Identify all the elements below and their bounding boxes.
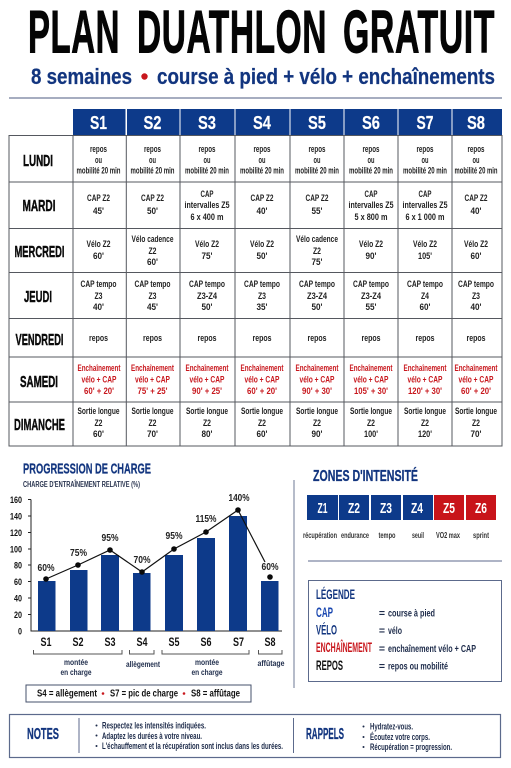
row: dimanche: Sortie longue [241, 406, 283, 417]
zone labels: tempo [378, 531, 396, 540]
row: samedi: 75' + 25' [138, 386, 168, 397]
row: mardi: CAP [418, 189, 432, 200]
row: lundi: mobilité 20 min [185, 166, 229, 176]
row: mardi: CAP [200, 189, 214, 200]
legend rows: ENCHAÎNEMENT [316, 638, 372, 655]
row: dimanche: Sortie longue [78, 406, 120, 417]
bar chart: 115% [196, 513, 217, 525]
row: mardi: intervalles Z5 [348, 200, 394, 211]
row: jeudi: 50' [312, 302, 322, 313]
row: mardi: 50' [147, 206, 158, 217]
row: mercredi: MERCREDI [14, 244, 64, 261]
table header weeks: S2 [144, 113, 162, 133]
row: jeudi: CAP tempo [407, 279, 443, 290]
bar chart: 80 [14, 560, 22, 572]
bar chart: S3 [104, 635, 116, 649]
legend rows [316, 604, 476, 673]
row: mardi: CAP Z2 [141, 193, 164, 204]
bar chart: 40 [14, 594, 22, 604]
phase brackets: affûtage [258, 659, 285, 668]
heading: rappels: RAPPELS [306, 726, 344, 743]
row: mercredi: Vélo Z2 [195, 239, 219, 250]
row: vendredi: repos [466, 333, 486, 344]
row: samedi: vélo + CAP [135, 374, 170, 386]
row: samedi: vélo + CAP [244, 374, 280, 386]
row: samedi: Enchaînement [186, 363, 229, 374]
heading: progression: PROGRESSION DE CHARGE [23, 460, 151, 478]
row: jeudi: 35' [256, 302, 268, 313]
table header weeks: S8 [467, 113, 485, 133]
row: mercredi: Z2 [313, 246, 321, 257]
zone bar: Z2 [348, 500, 360, 517]
row: lundi: repos [254, 144, 270, 155]
row: jeudi: Z3-Z4 [361, 291, 382, 302]
bar chart: S8 [264, 635, 276, 649]
row: samedi: vélo + CAP [408, 374, 443, 386]
row: samedi: Enchaînement [240, 363, 284, 374]
row: mardi: intervalles Z5 [402, 200, 448, 211]
row: jeudi: Z3-Z4 [197, 291, 218, 302]
row: samedi: vélo + CAP [300, 374, 335, 386]
row: lundi: mobilité 20 min [295, 166, 339, 176]
row: lundi: repos [468, 144, 484, 155]
zone labels: endurance [341, 531, 369, 540]
row: lundi: ou [95, 155, 102, 166]
row: samedi: 90' + 30' [302, 386, 332, 397]
phase brackets: en charge [192, 668, 223, 677]
row: mardi [22, 189, 488, 223]
callout: chart key: S8 = affûtage [191, 688, 240, 700]
row: lundi: repos [416, 144, 434, 155]
row: vendredi: VENDREDI [16, 332, 64, 349]
row: dimanche: Z2 [258, 418, 266, 429]
notes list: Adaptez les durées à votre niveau. [102, 731, 202, 741]
row: samedi: 90' + 25' [192, 386, 222, 397]
row: samedi: 60' + 20' [84, 386, 114, 397]
row: dimanche: Z2 [367, 418, 375, 429]
row: mardi: intervalles Z5 [184, 200, 230, 211]
zone bar: Z6 [475, 500, 487, 517]
row: jeudi: 40' [93, 302, 104, 313]
row: dimanche: Z2 [472, 418, 480, 429]
row: jeudi: 45' [147, 302, 158, 313]
phase brackets: allègement [126, 660, 160, 669]
row: lundi: ou [472, 155, 480, 166]
row: mardi: CAP Z2 [250, 193, 274, 204]
row: mercredi: Z2 [148, 246, 156, 257]
row: mercredi [14, 234, 488, 268]
zone labels: seuil [412, 531, 424, 540]
subtitle: 8 semaines [31, 64, 132, 89]
heading: notes: NOTES [27, 726, 59, 743]
heading: zones: ZONES D'INTENSITÉ [313, 466, 418, 485]
row: lundi: mobilité 20 min [76, 166, 121, 176]
table header weeks: S4 [253, 113, 271, 133]
row: samedi: 105' + 30' [354, 386, 388, 397]
row: lundi: repos [362, 144, 380, 155]
legend rows: vélo [388, 625, 402, 637]
row: jeudi: Z3-Z4 [307, 291, 328, 302]
zone labels: sprint [473, 531, 489, 540]
bar chart: 60% [262, 561, 279, 573]
row: dimanche: 70' [147, 429, 158, 440]
row: jeudi: 60' [420, 302, 430, 313]
row: vendredi: repos [89, 333, 108, 344]
row: lundi: repos [198, 144, 216, 155]
bar chart: 70% [134, 554, 151, 566]
row: jeudi: 50' [202, 302, 212, 313]
row: dimanche: 70' [470, 429, 482, 440]
phase brackets [34, 650, 285, 677]
bar chart: S2 [72, 635, 84, 649]
callout: chart key [26, 685, 251, 702]
row: lundi: mobilité 20 min [240, 166, 284, 176]
zone bar: Z3 [380, 500, 392, 517]
row: lundi: ou [368, 155, 375, 166]
row: mercredi: Vélo Z2 [464, 239, 488, 250]
row: jeudi: Z3 [472, 291, 480, 302]
row: lundi: ou [204, 155, 211, 166]
row: dimanche: 80' [202, 429, 212, 440]
row: mercredi: 50' [256, 251, 268, 262]
row: samedi: Enchaînement [78, 363, 121, 374]
legend rows: = [379, 660, 385, 672]
row: mardi: 40' [470, 206, 482, 217]
table header weeks: S1 [90, 113, 107, 133]
row: dimanche: 100' [364, 429, 378, 440]
bar chart: 95% [102, 532, 119, 544]
phase brackets: montée [64, 658, 88, 667]
row: mardi: CAP Z2 [464, 193, 488, 204]
row: mercredi: Vélo Z2 [413, 239, 437, 250]
zone labels [303, 531, 489, 540]
rappels list: Écoutez votre corps. [370, 732, 430, 742]
row: mardi: CAP Z2 [306, 193, 328, 204]
row: mercredi: 90' [366, 251, 376, 262]
phase brackets: montée [195, 658, 219, 667]
zone labels: VO2 max [436, 531, 460, 540]
row: lundi: mobilité 20 min [130, 166, 175, 176]
row: mercredi: 60' [93, 251, 104, 262]
notes list: Respectez les intensités indiquées. [102, 720, 206, 730]
title: PLAN [28, 0, 120, 66]
rappels list [362, 722, 452, 752]
row: samedi: 60' + 20' [247, 386, 277, 397]
row: dimanche: Sortie longue [132, 406, 174, 417]
zone labels: récupération [303, 531, 337, 540]
row: dimanche: 90' [312, 429, 322, 440]
row: dimanche: 60' [93, 429, 104, 440]
row: dimanche: Z2 [203, 418, 211, 429]
row: mercredi: Vélo Z2 [86, 239, 110, 250]
row: jeudi: Z3 [148, 291, 156, 302]
bar chart: S4 [136, 635, 148, 649]
row: mercredi: Vélo Z2 [250, 239, 274, 250]
legend rows: repos ou mobilité [388, 660, 448, 672]
row: samedi: vélo + CAP [82, 374, 117, 386]
row: samedi: SAMEDI [20, 374, 58, 391]
row: mardi: 6 x 1 000 m [406, 212, 444, 223]
zone bar [307, 495, 496, 520]
row: dimanche: Sortie longue [350, 406, 392, 417]
legend rows: course à pied [388, 608, 435, 620]
row: mercredi: 75' [312, 257, 322, 268]
bar chart: 60% [38, 562, 55, 574]
heading: légende: LÉGENDE [316, 586, 355, 602]
row: dimanche: Sortie longue [296, 406, 338, 417]
row: dimanche: DIMANCHE [14, 417, 65, 434]
legend rows: = [379, 625, 385, 637]
zone bar: Z5 [443, 500, 455, 517]
row: vendredi: repos [308, 333, 326, 344]
row: mercredi: Vélo cadence [132, 234, 174, 245]
bar chart: 140% [228, 492, 250, 504]
panel: progression de charge [10, 460, 285, 702]
phase brackets: en charge [60, 668, 92, 677]
row: lundi: LUNDI [23, 153, 53, 170]
row: samedi [20, 363, 498, 397]
row: samedi: 60' + 20' [461, 386, 491, 397]
row: jeudi: JEUDI [24, 289, 52, 306]
legend rows: VÉLO [316, 622, 337, 638]
bar chart: 60 [14, 577, 22, 588]
row: samedi: Enchaînement [296, 363, 339, 374]
row: samedi: 120' + 30' [408, 386, 442, 397]
row: dimanche: 60' [256, 429, 268, 440]
zone bar: Z1 [318, 500, 328, 517]
row: mardi: CAP Z2 [87, 193, 110, 204]
row: lundi: ou [149, 155, 156, 166]
legend rows: = [379, 608, 385, 620]
panel: training table [9, 109, 502, 446]
callout: chart key: S4 = allègement [37, 688, 98, 700]
row: vendredi: repos [143, 333, 162, 344]
row: mercredi: Vélo Z2 [359, 239, 383, 250]
bar chart: S7 [233, 635, 244, 649]
row: lundi: mobilité 20 min [349, 166, 393, 176]
row: jeudi: CAP tempo [353, 279, 389, 290]
row: mercredi: 60' [147, 257, 158, 268]
row: dimanche [14, 406, 497, 440]
row: lundi: ou [314, 155, 321, 166]
row: vendredi: repos [362, 333, 380, 344]
row: mardi: CAP [364, 189, 378, 200]
callout: chart key: S7 = pic de charge [110, 688, 178, 700]
row: lundi [23, 144, 498, 176]
row: jeudi: Z4 [421, 291, 430, 302]
chart subtitle: CHARGE D'ENTRAÎNEMENT RELATIVE (%) [23, 480, 140, 489]
row: jeudi: Z3 [258, 291, 266, 302]
bar chart: 140 [10, 512, 22, 522]
row: jeudi: 55' [366, 302, 376, 313]
row: dimanche: Z2 [94, 418, 102, 429]
row: mercredi: Vélo cadence [296, 234, 338, 245]
row: vendredi: repos [252, 333, 272, 344]
bar chart: S5 [168, 635, 180, 649]
row: samedi: vélo + CAP [190, 374, 225, 386]
table header weeks: S7 [416, 113, 434, 133]
row: vendredi: repos [198, 333, 216, 344]
table header weeks: S6 [362, 113, 380, 133]
panel: zones d'intensité [303, 466, 496, 540]
legend rows: CAP [316, 604, 333, 620]
legend rows: REPOS [316, 657, 343, 673]
row: dimanche: Z2 [313, 418, 321, 429]
row: mardi: 6 x 400 m [190, 212, 224, 223]
row: mercredi: 75' [202, 251, 212, 262]
table header weeks: S5 [308, 113, 326, 133]
row: jeudi: CAP tempo [244, 279, 280, 290]
row: lundi: repos [90, 144, 107, 155]
row: jeudi: 40' [470, 302, 482, 313]
row: lundi: repos [144, 144, 161, 155]
row: dimanche: Sortie longue [404, 406, 446, 417]
bar chart: 75% [70, 547, 88, 559]
row: mardi: 55' [312, 206, 322, 217]
notes list: L'échauffement et la récupération sont inclus dans les durées. [102, 741, 283, 751]
row: lundi: ou [258, 155, 266, 166]
title: DUATHLON [137, 0, 327, 66]
zone bar: Z4 [411, 500, 423, 517]
legend rows: = [379, 643, 385, 655]
notes list [96, 720, 283, 751]
row: mercredi: 60' [470, 251, 482, 262]
row: vendredi: repos [416, 333, 434, 344]
row: mardi: 45' [93, 206, 104, 217]
row: mardi: MARDI [22, 198, 56, 215]
row: jeudi: CAP tempo [299, 279, 335, 290]
row: dimanche: Z2 [421, 418, 429, 429]
row: samedi: Enchaînement [404, 363, 447, 374]
row: lundi: mobilité 20 min [403, 166, 447, 176]
bar chart: 100 [10, 544, 22, 556]
bar chart: 120 [10, 528, 22, 539]
row: mardi: 40' [256, 206, 268, 217]
row: jeudi: CAP tempo [80, 279, 117, 290]
row: lundi: repos [308, 144, 326, 155]
row: mardi: 5 x 800 m [354, 212, 388, 223]
row: dimanche: 120' [418, 429, 432, 440]
bar chart: 95% [166, 530, 183, 542]
bar chart [10, 492, 282, 649]
bar chart: 0 [18, 626, 22, 638]
row: dimanche: Z2 [148, 418, 156, 429]
panel: légende [308, 580, 502, 682]
row: jeudi: CAP tempo [134, 279, 171, 290]
row: mercredi: 105' [418, 251, 432, 262]
table header weeks [73, 109, 502, 136]
bar chart: S6 [200, 635, 212, 649]
row: jeudi: CAP tempo [458, 279, 494, 290]
bar chart: 160 [10, 495, 22, 506]
table header weeks: S3 [198, 113, 216, 133]
row: samedi: Enchaînement [350, 363, 393, 374]
bar chart: 20 [14, 610, 22, 621]
row: samedi: vélo + CAP [458, 374, 494, 386]
row: dimanche: Sortie longue [186, 406, 228, 417]
row: vendredi [16, 332, 486, 349]
rappels list: Hydratez-vous. [370, 722, 413, 732]
row: samedi: Enchaînement [131, 363, 175, 374]
row: jeudi: Z3 [94, 291, 102, 302]
rappels list: Récupération = progression. [370, 742, 452, 752]
bar chart: S1 [40, 635, 52, 649]
panel: notes et rappels [10, 714, 500, 758]
row: jeudi: CAP tempo [189, 279, 225, 290]
row: jeudi [24, 279, 494, 313]
row: lundi: ou [422, 155, 429, 166]
row: samedi: vélo + CAP [354, 374, 389, 386]
